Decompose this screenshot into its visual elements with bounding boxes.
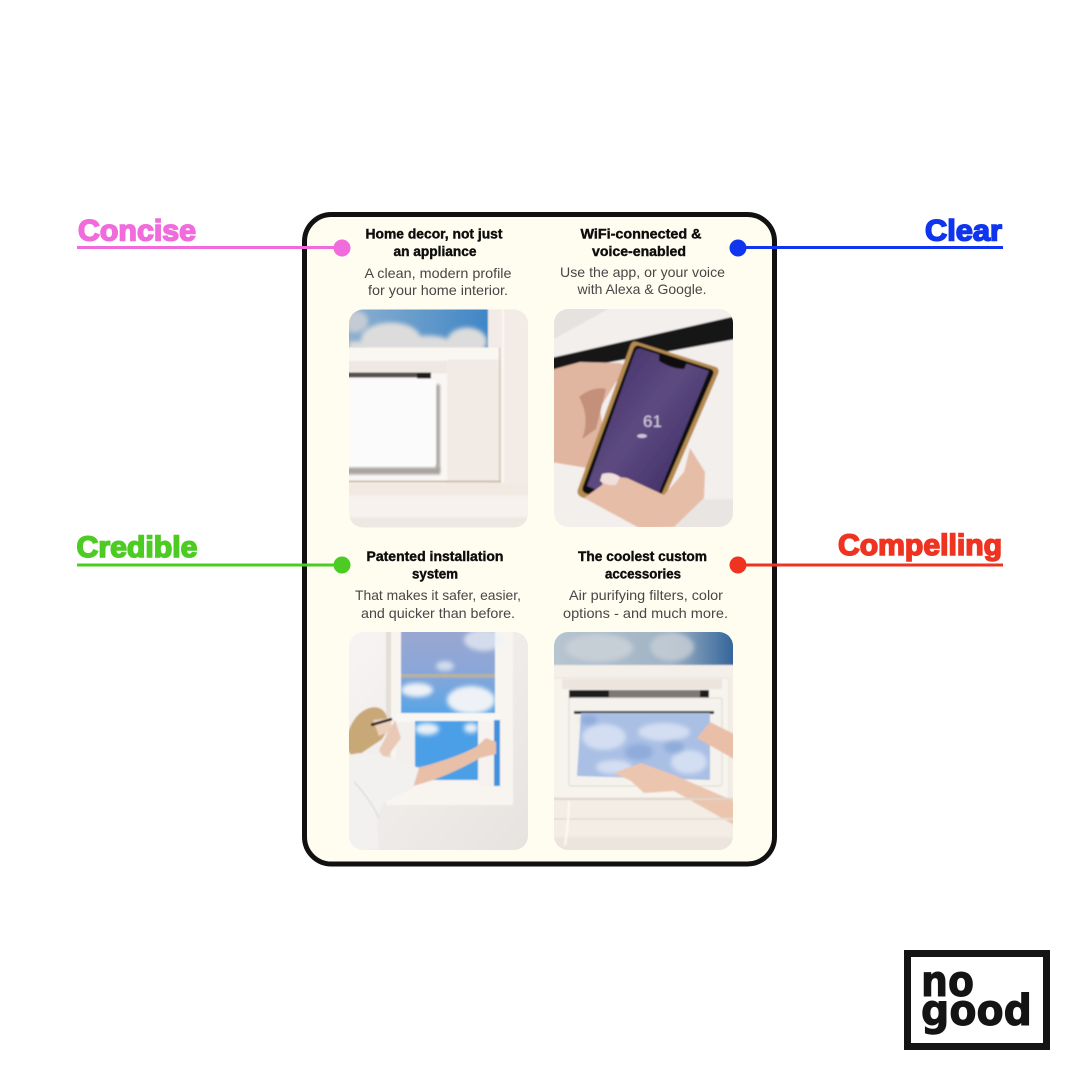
text: accessories description — [563, 587, 728, 621]
text: patented description: That makes it safer, easier, — [355, 587, 521, 603]
heading: patented: Patented installation — [366, 548, 504, 564]
photo: woman installing window unit — [346, 629, 531, 853]
label: Credible — [76, 531, 350, 574]
heading: patented — [366, 548, 504, 582]
text: accessories description: options - and much more. — [563, 605, 728, 621]
heading: home decor — [366, 226, 503, 259]
label: Clear — [730, 214, 1003, 256]
photo: window unit close-up — [342, 306, 531, 530]
heading: patented: system — [412, 566, 458, 582]
text: home decor description: for your home interior. — [368, 282, 508, 298]
heading: accessories: accessories — [605, 566, 681, 582]
heading: wifi: WiFi-connected & — [580, 226, 702, 242]
photo: hands holding phone — [551, 306, 736, 530]
logo: no good — [908, 954, 1046, 1046]
text: wifi description: with Alexa & Google. — [577, 281, 706, 297]
text: wifi description — [560, 264, 725, 297]
heading: accessories: The coolest custom — [578, 548, 707, 564]
heading: home decor: an appliance — [394, 243, 477, 259]
label: Concise — [77, 214, 350, 256]
heading: wifi — [580, 226, 702, 259]
photo: hands holding phone: 61 — [643, 412, 662, 431]
logo: no good: good — [921, 986, 1032, 1036]
text: accessories description: Air purifying filters, color — [569, 587, 723, 603]
heading: accessories — [578, 548, 707, 582]
label: Compelling: Compelling — [838, 529, 1002, 562]
heading: home decor: Home decor, not just — [366, 226, 503, 242]
logo: no good: no — [921, 957, 974, 1007]
label: Concise: Concise — [78, 214, 196, 248]
label: Clear: Clear — [925, 214, 1002, 248]
panel: product card — [304, 214, 774, 864]
text: home decor description: A clean, modern profile — [364, 265, 512, 281]
text: patented description — [355, 587, 521, 621]
label: Credible: Credible — [76, 531, 198, 564]
text: wifi description: Use the app, or your voice — [560, 264, 725, 280]
label: Compelling — [730, 529, 1003, 574]
photo: replacing air filter — [551, 629, 736, 853]
text: patented description: and quicker than before. — [361, 605, 515, 621]
heading: wifi: voice-enabled — [592, 243, 686, 259]
text: home decor description — [364, 265, 512, 298]
